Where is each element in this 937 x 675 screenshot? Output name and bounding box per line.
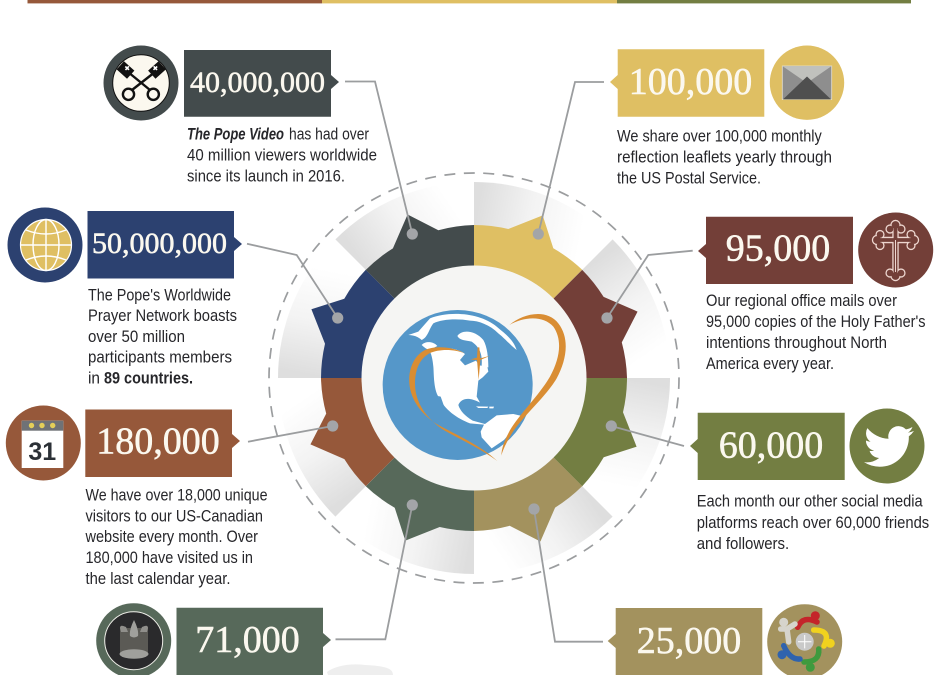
- description: Our regional office mails over: [706, 291, 897, 310]
- stat box: [690, 413, 845, 480]
- description: [617, 127, 832, 188]
- description: website every month. Over: [85, 527, 258, 546]
- panel: 25,000: [608, 604, 842, 675]
- panel: 95,000: [698, 212, 933, 373]
- stat box: [176, 608, 331, 675]
- icon: cross: [858, 212, 933, 288]
- icon: calendar: 31: [28, 438, 56, 466]
- description: [697, 492, 929, 553]
- number: 50,000,000: [92, 227, 227, 260]
- number: 95,000: [726, 228, 830, 270]
- icon: candle: [96, 603, 171, 675]
- stat box: [610, 49, 764, 117]
- icon: twitter bird: [850, 408, 924, 484]
- stat box: [88, 211, 242, 278]
- description: America every year.: [706, 354, 834, 373]
- description: [706, 291, 926, 373]
- panel: 40,000,000: [104, 46, 377, 186]
- icon: envelope: [770, 45, 844, 120]
- stat box: [608, 608, 762, 675]
- icon: globe: [8, 208, 82, 282]
- description: reflection leaflets yearly through: [617, 148, 832, 166]
- number: 60,000: [719, 424, 823, 466]
- description: 180,000 have visited us in: [86, 548, 253, 567]
- description: since its launch in 2016.: [187, 167, 345, 186]
- description: the last calendar year.: [86, 569, 230, 588]
- panel: 50,000,000: [8, 208, 242, 388]
- description: 40 million viewers worldwide: [187, 146, 377, 165]
- description: We share over 100,000 monthly: [617, 127, 822, 146]
- top colour bar: [28, 0, 911, 3]
- icon: crossed keys: [104, 46, 178, 120]
- connector dots: [327, 228, 617, 515]
- faint grey brush shape at page bottom: [327, 664, 393, 675]
- panel: 71,000: [96, 603, 331, 675]
- central logo: globe and heart: [383, 310, 566, 461]
- stat box: [698, 217, 853, 284]
- icon: calendar: [6, 406, 81, 480]
- panel: 180,000: [6, 406, 268, 588]
- dashed ring: [269, 173, 679, 583]
- grey shadow wedges behind gear: [237, 141, 711, 615]
- number: 180,000: [96, 420, 220, 462]
- description: [88, 286, 237, 388]
- number: 71,000: [195, 619, 300, 661]
- description: and followers.: [697, 534, 789, 553]
- description: Prayer Network boasts: [88, 306, 237, 325]
- description: over 50 million: [88, 327, 185, 346]
- description: We have over 18,000 unique: [86, 486, 268, 505]
- description: [187, 124, 377, 186]
- description: in: [88, 368, 100, 388]
- description: visitors to our US-Canadian: [86, 506, 263, 526]
- icon: five people in a circle: [767, 604, 842, 675]
- number: 100,000: [629, 61, 752, 103]
- description: The Pope Video: [187, 124, 284, 144]
- panel: 60,000: [690, 408, 929, 553]
- description: [85, 486, 268, 588]
- description: 89 countries.: [104, 368, 193, 388]
- description: participants members: [88, 348, 232, 366]
- number: 25,000: [637, 620, 741, 662]
- panel: 100,000: [610, 45, 844, 187]
- description: has had over: [289, 124, 369, 144]
- number: 40,000,000: [190, 66, 325, 99]
- description: The Pope's Worldwide: [88, 286, 231, 305]
- gear wheel with eight coloured segments: [283, 187, 665, 569]
- stat box: [184, 50, 339, 117]
- description: intentions throughout North: [706, 333, 887, 352]
- stat box: [85, 410, 240, 477]
- connector lines: [247, 82, 693, 642]
- description: the US Postal Service.: [617, 168, 761, 188]
